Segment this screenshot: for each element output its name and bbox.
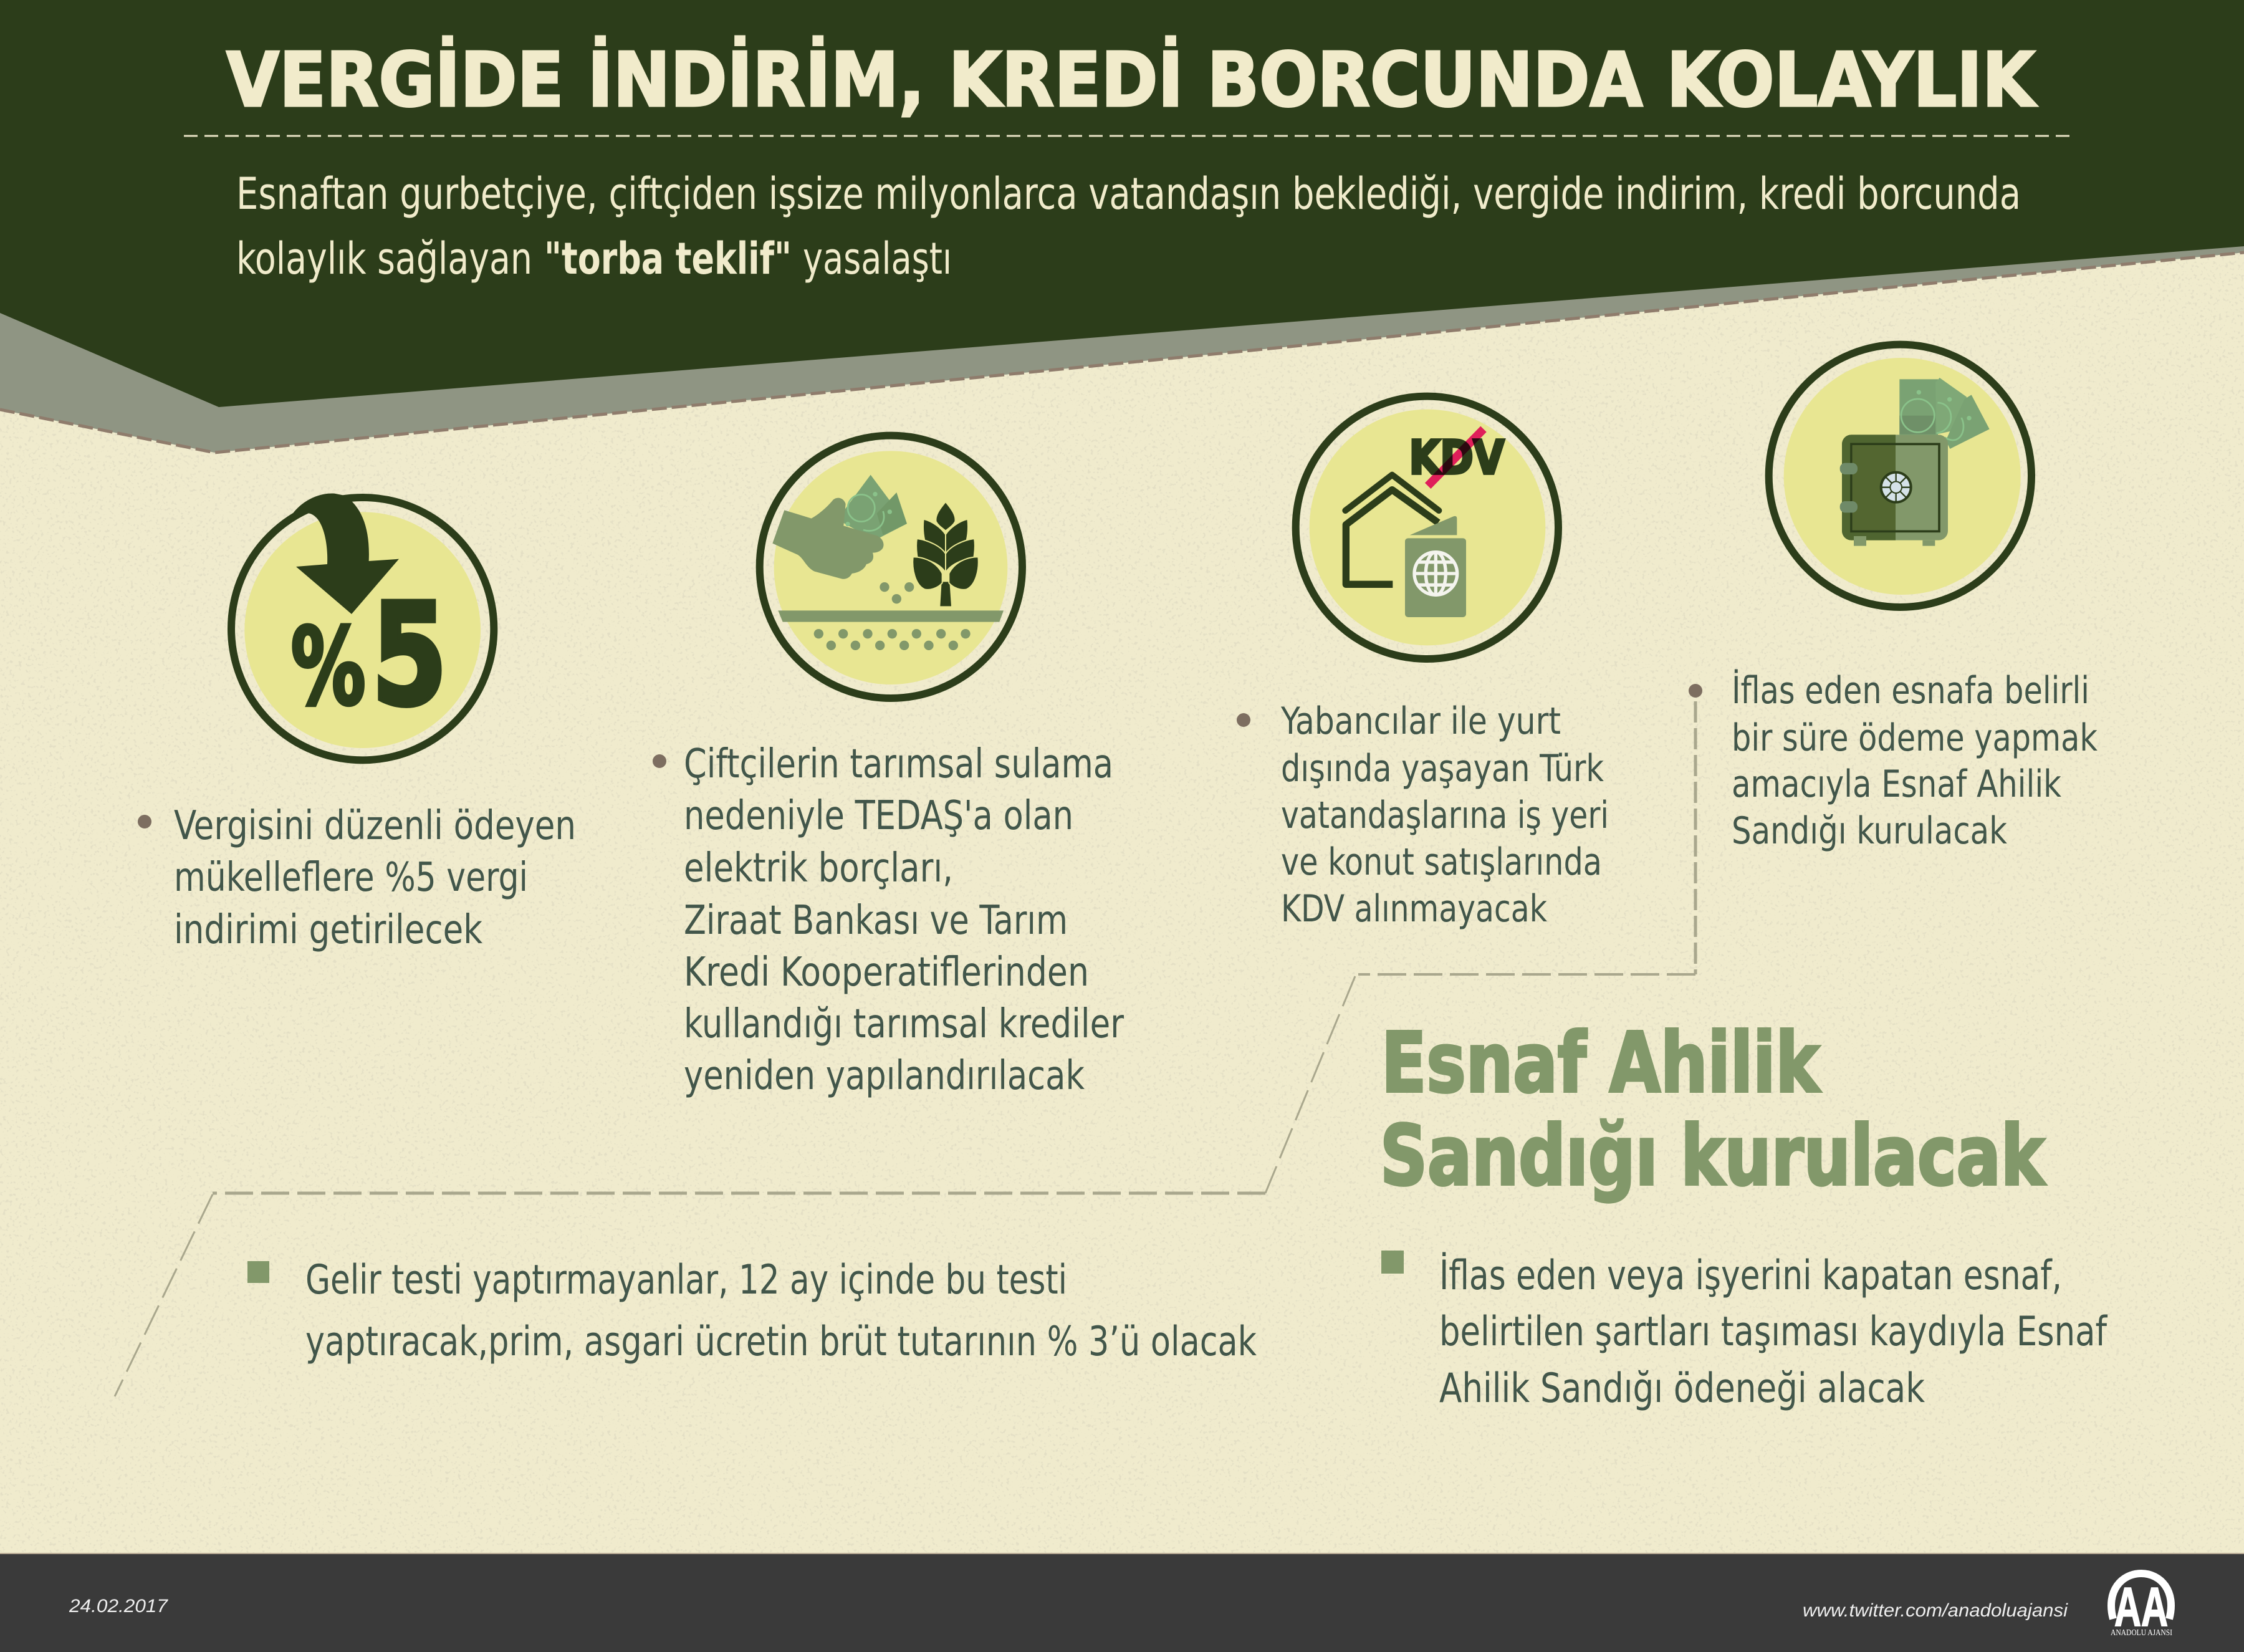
text block: farmers: elektrik borçları, — [684, 845, 953, 891]
date: 24.02.2017 — [69, 1596, 168, 1616]
text block: foreigners: ve konut satışlarında — [1281, 840, 1602, 884]
text block: allowance: Ahilik Sandığı ödeneği alacak — [1439, 1365, 1925, 1412]
text block: foreigners: Yabancılar ile yurt — [1280, 699, 1561, 743]
text block: farmers: yeniden yapılandırılacak — [684, 1053, 1085, 1099]
text block: tax discount: mükelleflere %5 vergi — [174, 855, 528, 901]
text block: bankrupt tradesmen: bir süre ödeme yapmak — [1732, 716, 2098, 760]
text block: tax discount — [138, 803, 576, 953]
text block: farmers: Kredi Kooperatiflerinden — [684, 949, 1089, 996]
text block: income test: Gelir testi yaptırmayanlar, 12 ay içinde bu testi — [305, 1257, 1067, 1304]
dashed connector line — [115, 701, 1695, 1396]
text block: allowance — [1381, 1251, 2107, 1412]
subtitle: Esnaftan gurbetçiye, çiftçiden işsize milyonlarca vatandaşın beklediği, vergide indirim, kredi borcunda — [236, 168, 2021, 219]
text block: bankrupt tradesmen — [1689, 668, 2098, 853]
text block: income test — [247, 1257, 1257, 1365]
text block: farmers: nedeniyle TEDAŞ'a olan — [684, 793, 1073, 839]
icon: farming and money — [760, 436, 1022, 698]
text block: tax discount: Vergisini düzenli ödeyen — [174, 803, 576, 849]
text block: farmers: Çiftçilerin tarımsal sulama — [684, 741, 1113, 787]
text block: bankrupt tradesmen: İflas eden esnafa belirli — [1732, 668, 2089, 713]
logo: Anadolu Ajansi — [2111, 1573, 2172, 1638]
title: VERGİDE İNDİRİM, KREDİ BORCUNDA KOLAYLIK — [226, 37, 2037, 124]
text block: tax discount: indirimi getirilecek — [174, 907, 483, 953]
icon: percent five discount: % — [291, 606, 366, 729]
subtitle: "torba teklif" — [544, 233, 792, 284]
icon: KDV house passport — [1296, 396, 1558, 659]
subtitle — [236, 168, 2021, 284]
text block: income test: yaptıracak,prim, asgari ücretin brüt tutarının % 3’ü olacak — [305, 1318, 1257, 1365]
heading: Esnaf Ahilik: Sandığı kurulacak — [1380, 1108, 2046, 1204]
logo: Anadolu Ajansi: ANADOLU AJANSI — [2111, 1628, 2172, 1638]
text block: farmers: kullandığı tarımsal krediler — [684, 1001, 1124, 1047]
heading: Esnaf Ahilik: Esnaf Ahilik — [1381, 1016, 1821, 1112]
text block: farmers: Ziraat Bankası ve Tarım — [684, 898, 1068, 944]
text block: foreigners: vatandaşlarına iş yeri — [1281, 794, 1609, 837]
text block: foreigners: dışında yaşayan Türk — [1281, 747, 1604, 790]
subtitle: kolaylık sağlayan — [236, 233, 532, 284]
subtitle: yasalaştı — [803, 233, 952, 284]
icon: safe with money — [1769, 345, 2031, 607]
header panel — [0, 0, 2244, 407]
text block: allowance: İflas eden veya işyerini kapatan esnaf, — [1439, 1251, 2062, 1299]
heading: Esnaf Ahilik — [1380, 1016, 2046, 1204]
text block: bankrupt tradesmen: Sandığı kurulacak — [1732, 809, 2008, 853]
text block: allowance: belirtilen şartları taşıması kaydıyla Esnaf — [1439, 1309, 2107, 1355]
footer bar — [0, 1553, 2244, 1652]
text block: farmers — [653, 741, 1124, 1099]
text block: bankrupt tradesmen: amacıyla Esnaf Ahilik — [1732, 762, 2062, 806]
header shadow band — [0, 237, 2244, 453]
icon: percent five discount — [231, 494, 494, 760]
icon: percent five discount: 5 — [372, 574, 448, 737]
text block: foreigners: KDV alınmayacak — [1281, 887, 1548, 931]
logo: Anadolu Ajansi: AA — [2114, 1576, 2168, 1638]
website: www.twitter.com/anadoluajansi — [1803, 1600, 2068, 1621]
icon: KDV house passport: KDV — [1409, 431, 1504, 484]
text block: foreigners — [1237, 699, 1609, 931]
